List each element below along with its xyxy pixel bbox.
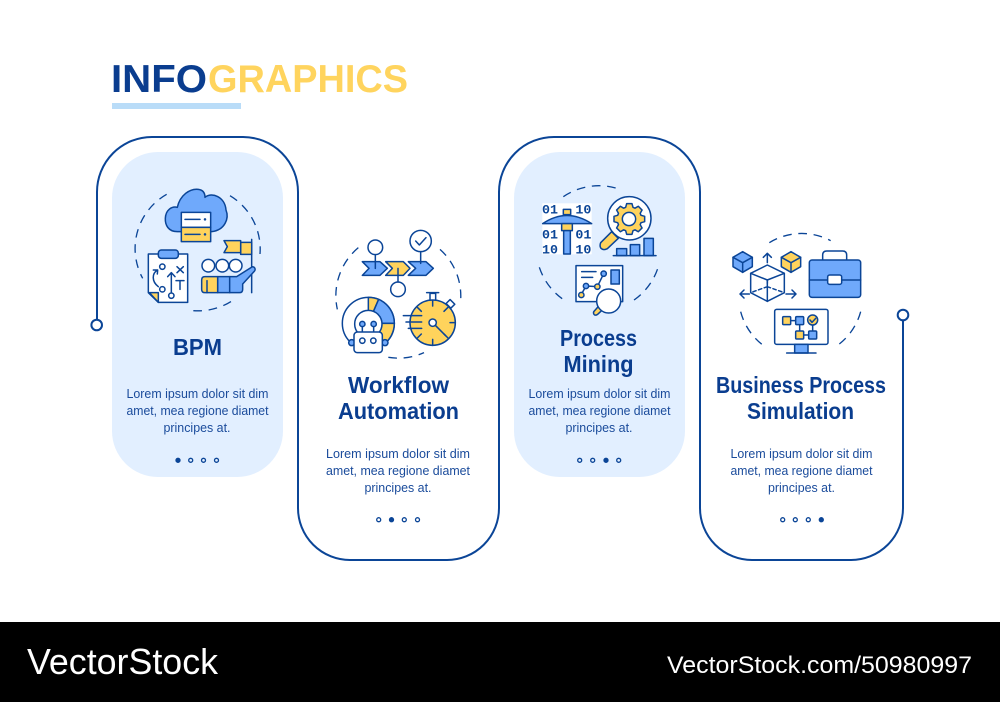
text: Process Mining description: Lorem ipsum dolor sit dim [528,387,670,401]
connecting outline [91,137,908,560]
icon: Process Mining: 10 [542,244,558,259]
icon: Process Mining: 10 [575,244,591,259]
heading: Business Process Simulation: Business Process [716,372,886,398]
panel: BPM background [112,152,283,477]
text: Business Process Simulation description [730,447,873,495]
heading: Workflow Automation [338,372,459,424]
icon: Workflow Automation [336,230,461,358]
watermark bar: VectorStock [27,641,219,682]
text: BPM description: Lorem ipsum dolor sit dim [126,387,268,401]
heading: Workflow Automation: Workflow [348,372,449,398]
pagination dots: Process Mining [578,458,621,462]
text: Process Mining description: amet, mea regione diamet [528,404,671,418]
title [111,58,408,109]
text: Workflow Automation description: amet, mea regione diamet [326,464,471,478]
icon: Process Mining: 10 [575,204,591,219]
watermark bar [0,622,1000,702]
text: Workflow Automation description [326,447,471,495]
icon: Process Mining: 01 [542,204,558,219]
text: Workflow Automation description: Lorem ipsum dolor sit dim [326,447,470,461]
icon: Process Mining: 01 [542,228,558,243]
title: GRAPHICS [208,58,408,101]
text: Workflow Automation description: principes at. [364,481,432,495]
heading: Business Process Simulation: Simulation [747,398,854,424]
heading: Process Mining: Mining [564,351,634,377]
text: Business Process Simulation description: Lorem ipsum dolor sit dim [730,447,872,461]
heading: Business Process Simulation [716,372,886,424]
text: Business Process Simulation description: principes at. [768,481,835,495]
text: Process Mining description: principes at. [566,421,632,435]
watermark bar: VectorStock.com/50980997 [667,652,972,679]
text: Process Mining description [528,387,671,435]
text: Business Process Simulation description: amet, mea regione diamet [730,464,873,478]
pagination dots: Workflow Automation [377,518,420,522]
pagination dots: BPM [176,458,218,462]
heading: Workflow Automation: Automation [338,398,459,424]
icon: Process Mining [539,186,658,315]
heading: Process Mining [560,325,637,377]
text: BPM description: principes at. [164,421,230,435]
icon: Process Mining: 01 [575,228,591,243]
panel: Process Mining background [514,152,685,477]
text: BPM description: amet, mea regione diamet [126,404,269,418]
heading: BPM: BPM [173,334,222,360]
icon: Business Process Simulation [733,233,862,353]
icon: BPM [135,189,260,311]
title: INFO [111,58,207,101]
heading: Process Mining: Process [560,325,637,351]
pagination dots: Business Process Simulation [781,518,823,522]
text: BPM description [126,387,269,435]
